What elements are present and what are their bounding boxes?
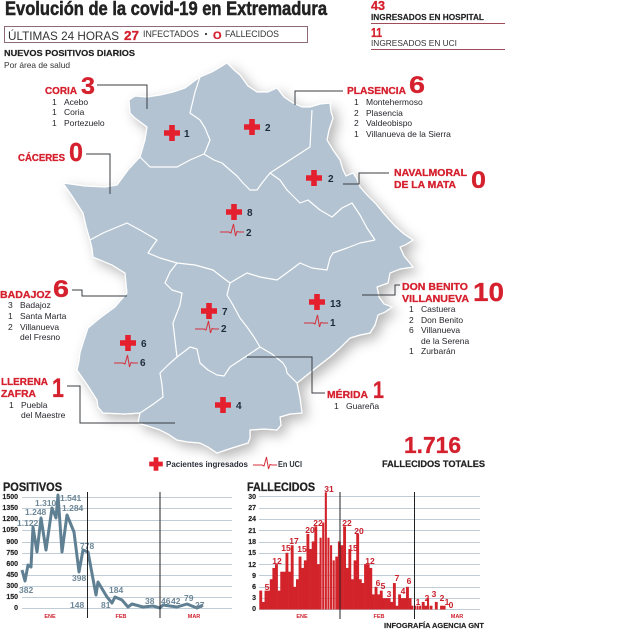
fallecidos data labels: 6 [407, 576, 412, 586]
label: Mérida: MÉRIDA [327, 388, 368, 401]
label: Coria: Coria [64, 107, 85, 117]
label: Plasencia: PLASENCIA [347, 86, 406, 97]
label: Llerena-Zafra: Puebla [21, 400, 48, 410]
label: Badajoz [0, 276, 127, 342]
positivos data labels: 27 [195, 600, 205, 610]
positivos data labels: 382 [19, 585, 33, 595]
legend: En UCI [278, 460, 302, 469]
label: Mérida: 1 [334, 401, 339, 411]
marker: Coria [164, 125, 190, 141]
label: Coria: Acebo [64, 97, 88, 107]
label: Plasencia: Villanueva de la Sierra [366, 129, 451, 139]
fallecidos month labels [296, 614, 463, 620]
positivos y axis: 1050 [2, 527, 18, 534]
credit: INFOGRAFÍA AGENCIA GNT [384, 621, 485, 630]
positivos month labels: MAR [188, 614, 200, 620]
label: Mérida: 1 [373, 377, 384, 404]
label: Plasencia: Valdeobispo [366, 118, 412, 128]
last 24 hours box: 27 [124, 28, 139, 43]
fallecidos data labels: 12 [365, 556, 375, 566]
positivos data labels: 184 [109, 585, 123, 595]
label: Coria: CORIA [45, 86, 77, 97]
fallecidos data labels: 15 [297, 544, 307, 554]
label: Don Benito-Villanueva: 10 [473, 277, 504, 307]
total deaths [382, 432, 485, 469]
label: Plasencia [295, 72, 451, 139]
marker: Mérida [195, 303, 228, 335]
fallecidos data labels: 2 [440, 593, 445, 603]
positivos data labels: 46 [161, 596, 171, 606]
label: Don Benito-Villanueva: 1 [409, 346, 414, 356]
label: Don Benito-Villanueva: Villanueva [421, 325, 460, 335]
last 24 hours box: O [213, 30, 222, 42]
fallecidos y axis: 15 [248, 550, 256, 557]
fallecidos data labels: 2 [425, 593, 430, 603]
label: Don Benito-Villanueva: VILLANUEVA [402, 294, 469, 305]
label: Llerena-Zafra: 1 [9, 400, 14, 410]
label: Plasencia: 2 [354, 108, 359, 118]
marker: Llerena-Zafra [215, 397, 242, 413]
positivos data labels: 1.248 [25, 507, 47, 517]
positivos data labels [17, 493, 205, 610]
label: Don Benito-Villanueva: DON BENITO [402, 282, 468, 293]
positivos data labels: 79 [184, 593, 194, 603]
fallecidos data labels: 15 [348, 543, 358, 553]
positivos y axis: 900 [6, 539, 18, 546]
positivos data labels: 148 [70, 600, 84, 610]
positivos grid [22, 498, 232, 608]
label: Cáceres: 0 [69, 137, 83, 167]
chart: fallecidos [247, 480, 480, 620]
label: Don Benito-Villanueva: Don Benito [421, 315, 463, 325]
fallecidos data labels: 3 [387, 589, 392, 599]
label: Navalmoral de la Mata: 0 [471, 167, 486, 194]
positivos heading: POSITIVOS [3, 480, 62, 494]
fallecidos month labels: FEB [374, 614, 385, 620]
total deaths: FALLECIDOS TOTALES [382, 459, 485, 469]
fallecidos y axis: 6 [252, 584, 256, 591]
label: Don Benito-Villanueva: de la Serena [421, 336, 469, 346]
label: Badajoz: del Fresno [20, 332, 60, 342]
positivos data labels: 1.284 [62, 503, 84, 513]
fallecidos data labels: 15 [281, 543, 291, 553]
last 24 hours box: FALLECIDOS [225, 29, 279, 39]
label: Don Benito-Villanueva: 6 [409, 325, 414, 335]
label: Llerena-Zafra: LLERENA [1, 377, 48, 388]
fallecidos y axis: 18 [248, 539, 256, 546]
fallecidos data labels: 12 [272, 556, 282, 566]
label: Mérida [247, 357, 384, 411]
label: Llerena-Zafra: del Maestre [21, 410, 66, 420]
fallecidos heading: FALLECIDOS [247, 480, 315, 494]
hospital stats: 11 [371, 25, 382, 40]
positivos month labels: FEB [116, 614, 127, 620]
marker: Plasencia [244, 119, 271, 135]
legend: Pacientes ingresados [166, 460, 249, 469]
positivos y axis: 600 [6, 561, 18, 568]
label: Coria: Portezuelo [64, 118, 105, 128]
positivos y axis [2, 494, 18, 612]
fallecidos y axis [248, 494, 256, 613]
label: Don Benito-Villanueva [362, 277, 504, 356]
label: Cáceres: CÁCERES [18, 151, 65, 164]
marker: Badajoz: 6 [141, 339, 147, 350]
label: Navalmoral de la Mata: DE LA MATA [394, 180, 456, 191]
label: Badajoz: Santa Marta [20, 311, 67, 321]
marker: Cáceres: 2 [246, 228, 252, 239]
positivos y axis: 300 [6, 583, 18, 590]
fallecidos data labels: 17 [289, 536, 299, 546]
map subtitle: NUEVOS POSITIVOS DIARIOS [4, 48, 135, 58]
marker: Don Benito: 13 [330, 299, 342, 310]
positivos y axis: 0 [14, 605, 18, 612]
label: Plasencia: Plasencia [366, 108, 403, 118]
marker: Mérida: 2 [221, 324, 227, 335]
label: Plasencia: 2 [354, 118, 359, 128]
label: Badajoz: 1 [8, 311, 13, 321]
label: Navalmoral de la Mata [343, 167, 486, 194]
fallecidos data labels [265, 484, 454, 610]
label: Don Benito-Villanueva: 2 [409, 315, 414, 325]
fallecidos data labels: 6 [376, 578, 381, 588]
marker: Navalmoral [306, 170, 334, 186]
marker: Cáceres: 8 [247, 208, 253, 219]
marker: Mérida: 7 [222, 307, 228, 318]
label: Badajoz: Badajoz [20, 300, 51, 310]
label: Coria [45, 73, 147, 128]
label: Badajoz: Villanueva [20, 322, 59, 332]
fallecidos data labels: 5 [381, 581, 386, 591]
marker: Badajoz: 6 [140, 358, 146, 369]
fallecidos month labels: ENE [296, 614, 308, 620]
fallecidos y axis: 0 [252, 606, 256, 613]
positivos line [22, 495, 203, 608]
positivos data labels: 38 [145, 596, 155, 606]
label: Coria: 1 [52, 107, 57, 117]
positivos data labels: 42 [171, 596, 181, 606]
label: Mérida: Guareña [346, 401, 379, 411]
positivos data labels: 1.541 [60, 493, 82, 503]
fallecidos y axis: 24 [248, 516, 256, 523]
fallecidos bars [259, 492, 446, 610]
positivos data labels: 398 [72, 573, 86, 583]
fallecidos data labels: 7 [395, 573, 400, 583]
fallecidos month dividers [340, 492, 414, 619]
fallecidos month labels: MAR [451, 614, 463, 620]
label: Coria: 1 [52, 118, 57, 128]
positivos y axis: 750 [6, 550, 18, 557]
fallecidos data labels: 22 [342, 518, 352, 528]
label: Don Benito-Villanueva: Castuera [421, 304, 456, 314]
label: Cáceres [18, 137, 110, 194]
label: Coria: 1 [52, 97, 57, 107]
label: Don Benito-Villanueva: Zurbarán [421, 346, 456, 356]
marker: Coria: 1 [184, 129, 190, 140]
label: Badajoz: 2 [8, 322, 13, 332]
hospital stats [371, 0, 505, 50]
label: Badajoz: BADAJOZ [0, 290, 51, 301]
positivos y axis: 150 [6, 594, 18, 601]
label: Plasencia: 1 [354, 129, 359, 139]
positivos y axis: 1500 [2, 494, 18, 501]
fallecidos y axis: 3 [252, 595, 256, 602]
positivos month labels: ENE [44, 614, 56, 620]
marker: Navalmoral: 2 [328, 174, 334, 185]
fallecidos data labels: 0 [449, 600, 454, 610]
fallecidos data labels: 20 [354, 526, 364, 536]
fallecidos y axis: 27 [248, 505, 256, 512]
fallecidos data labels: 1 [445, 597, 450, 607]
fallecidos grid [259, 496, 480, 610]
label: Navalmoral de la Mata: NAVALMORAL [394, 168, 467, 179]
hospital stats: INGRESADOS EN UCI [371, 38, 457, 48]
map subtitle [4, 48, 135, 70]
map subtitle: Por área de salud [4, 60, 70, 70]
label: Llerena-Zafra: 1 [52, 373, 64, 403]
marker: Badajoz [114, 335, 147, 369]
label: Coria: 3 [81, 73, 95, 100]
fallecidos y axis: 12 [248, 562, 256, 569]
label: Don Benito-Villanueva: 1 [409, 304, 414, 314]
label: Plasencia: Montehermoso [366, 97, 423, 107]
fallecidos y axis: 30 [248, 494, 256, 501]
hospital stats: INGRESADOS EN HOSPITAL [371, 12, 484, 22]
fallecidos data labels: 31 [324, 484, 334, 494]
label: Badajoz: 3 [8, 300, 13, 310]
fallecidos y axis: 21 [248, 528, 256, 535]
fallecidos data labels: 3 [432, 589, 437, 599]
positivos data labels: 1.122 [17, 518, 39, 528]
positivos month labels [44, 614, 200, 620]
label: Badajoz: 6 [53, 276, 69, 303]
marker: Cáceres [220, 204, 253, 239]
last 24 hours box: INFECTADOS [143, 29, 199, 39]
fallecidos data labels: 5 [265, 582, 270, 592]
last 24 hours box: ÚLTIMAS 24 HORAS [8, 28, 119, 43]
positivos data labels: 81 [101, 600, 111, 610]
last 24 hours box [4, 26, 308, 43]
positivos data labels: 1.310 [35, 498, 57, 508]
marker: Don Benito: 1 [330, 318, 336, 329]
label: Plasencia: 1 [354, 97, 359, 107]
positivos month dividers [88, 492, 160, 618]
marker: Don Benito [304, 294, 342, 329]
fallecidos data labels: 22 [313, 518, 323, 528]
positivos y axis: 1200 [2, 516, 18, 523]
fallecidos data labels: 20 [305, 525, 315, 535]
total deaths: 1.716 [404, 432, 461, 458]
chart: positivos [2, 480, 232, 620]
legend [149, 457, 302, 471]
fallecidos y axis: 9 [252, 573, 256, 580]
positivos data labels: 778 [80, 541, 94, 551]
label: Plasencia: 6 [409, 72, 425, 99]
fallecidos data labels: 1 [416, 597, 421, 607]
label: Llerena-Zafra [1, 373, 175, 423]
label: Llerena-Zafra: ZAFRA [1, 389, 36, 400]
marker: Llerena-Zafra: 4 [236, 401, 242, 412]
map of Extremadura [63, 63, 413, 453]
marker: Plasencia: 2 [265, 123, 271, 134]
fallecidos data labels: 4 [401, 586, 406, 596]
positivos y axis: 1350 [2, 505, 18, 512]
positivos y axis: 450 [6, 572, 18, 579]
